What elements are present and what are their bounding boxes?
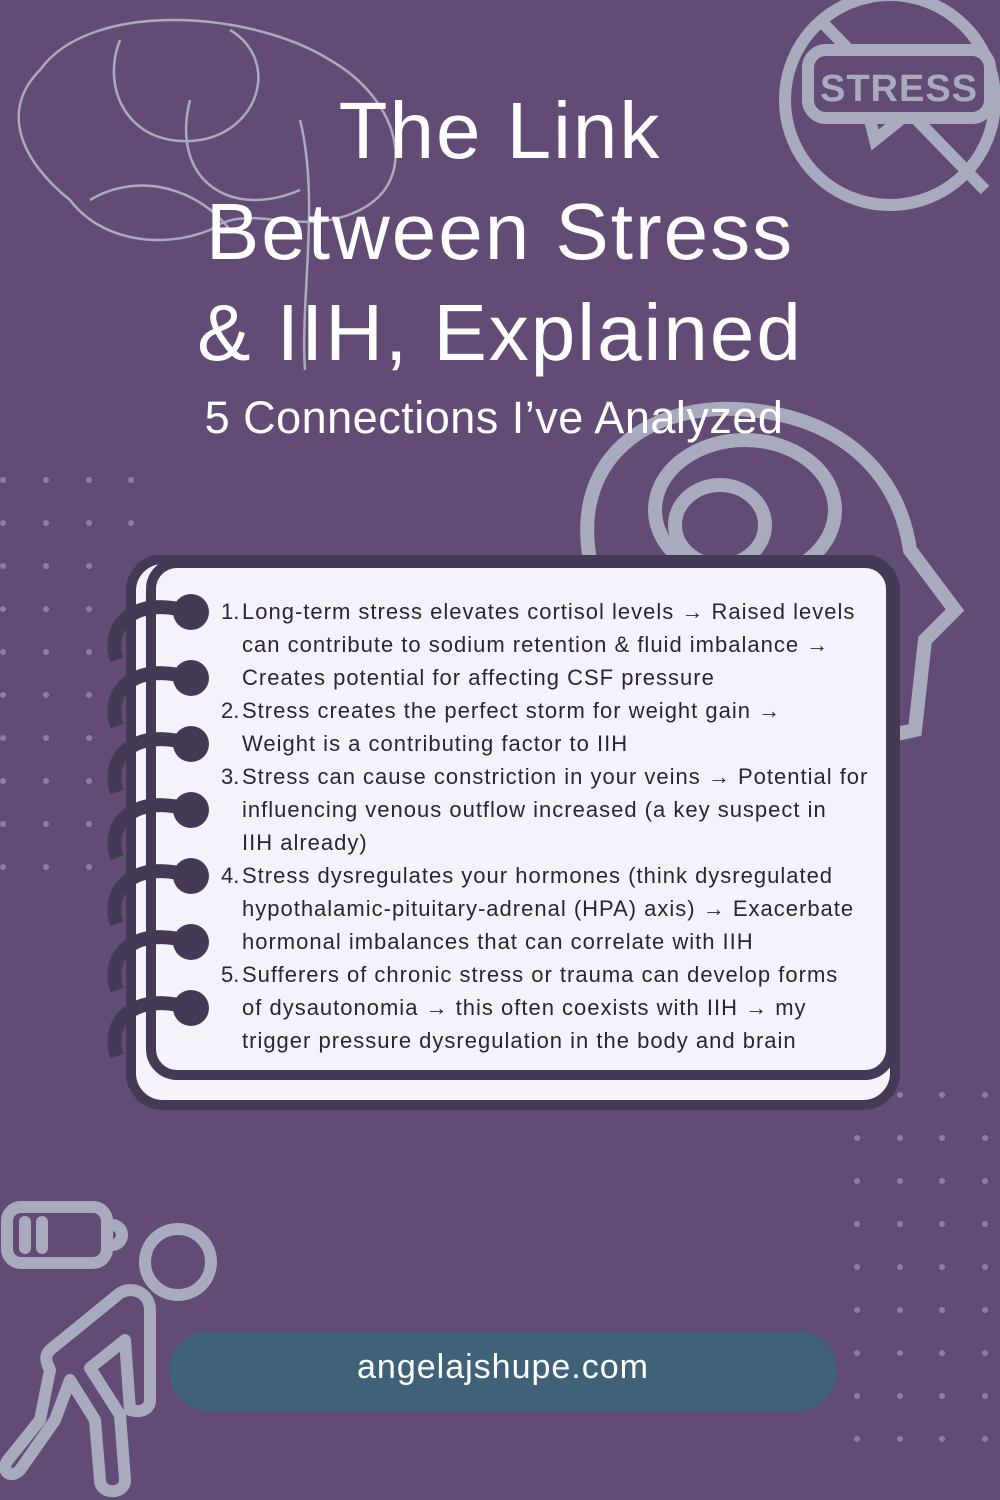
icon: stress sign [785, 0, 995, 205]
text block: list of connections: trigger pressure dysregulation in the body and brain [242, 1028, 797, 1053]
text block: list of connections: IIH already) [242, 830, 368, 855]
text block: list of connections: hypothalamic-pituitary-adrenal (HPA) axis) → Exacerbate [242, 896, 854, 921]
text block: list of connections: Stress dysregulates your hormones (think dysregulated [242, 863, 833, 888]
dot grids [0, 477, 134, 870]
title: & IIH, Explained [197, 288, 803, 377]
text block: list of connections: of dysautonomia → this often coexists with IIH → my [242, 995, 807, 1020]
title: Between Stress [206, 187, 794, 276]
icon: tired person with battery [5, 1207, 211, 1491]
text block: list of connections: Stress creates the perfect storm for weight gain → [242, 698, 781, 723]
icon: stress sign: STRESS [820, 68, 978, 110]
text block: list of connections [221, 599, 868, 1053]
footer: website pill: angelajshupe.com [357, 1348, 649, 1386]
title: The Link [339, 86, 661, 175]
text block: list of connections: Stress can cause constriction in your veins → Potential for [242, 764, 868, 789]
text block: list of connections: influencing venous outflow increased (a key suspect in [242, 797, 827, 822]
text block: list of connections: 5. [221, 962, 239, 987]
text block: list of connections: Long-term stress elevates cortisol levels → Raised levels [242, 599, 855, 624]
text block: list of connections: Weight is a contributing factor to IIH [242, 731, 628, 756]
text block: list of connections: 2. [221, 698, 239, 723]
spiral rings [114, 607, 190, 1056]
icon: brain doodle [19, 20, 396, 370]
subtitle: 5 Connections I’ve Analyzed [205, 392, 783, 443]
footer: website pill [169, 1331, 837, 1411]
panel: notebook [107, 555, 900, 1110]
text block: list of connections: Creates potential for affecting CSF pressure [242, 665, 715, 690]
icon: head profile [587, 409, 955, 740]
text block: list of connections: Sufferers of chronic stress or trauma can develop forms [242, 962, 838, 987]
text block: list of connections: 4. [221, 863, 239, 888]
text block: list of connections: can contribute to sodium retention & fluid imbalance → [242, 632, 829, 657]
title [197, 86, 803, 377]
text block: list of connections: 1. [221, 599, 239, 624]
text block: list of connections: 3. [221, 764, 239, 789]
text block: list of connections: hormonal imbalances that can correlate with IIH [242, 929, 754, 954]
